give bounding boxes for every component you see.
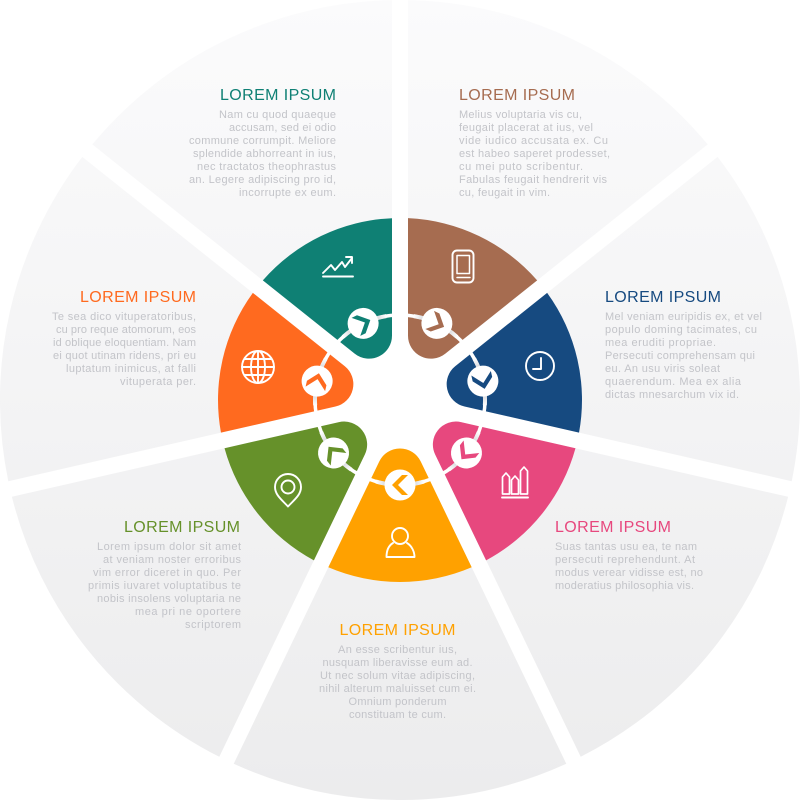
body: blue: Persecuti comprehensam qui: [605, 350, 755, 362]
body: green: [88, 541, 242, 631]
body: blue: mea eruditi propriae.: [605, 337, 716, 349]
body: yellow: nihil alterum maluisset cum ei.: [319, 683, 476, 695]
text block: brown: [459, 87, 610, 199]
outer panel: blue section: [447, 157, 800, 481]
segment: orange: [218, 293, 353, 433]
body: orange: vituperata per.: [120, 376, 196, 388]
body: yellow: Omnium ponderum: [348, 696, 446, 708]
marker: yellow chevron: [376, 470, 424, 500]
body: green: Lorem ipsum dolor sit amet: [97, 541, 241, 553]
body: orange: ei quot utinam ridens, pri eu: [53, 350, 196, 362]
body: orange: id oblique eloquentiam. Nam: [53, 337, 196, 349]
body: pink: [555, 541, 703, 592]
marker: blue chevron: [462, 354, 503, 408]
icon: user: [386, 528, 414, 557]
body: brown: Melius voluptaria vis cu,: [459, 109, 582, 121]
body: orange: Te sea dico vituperatoribus,: [52, 311, 196, 323]
body: orange: [52, 311, 196, 388]
body: teal: splendide abhorreant in ius,: [193, 148, 336, 160]
body: blue: quaerendum. Mea ex alia: [605, 376, 742, 388]
body: green: vim error diceret in quo. Per: [93, 567, 241, 579]
heading: yellow: LOREM IPSUM: [340, 622, 456, 639]
body: teal: Nam cu quod quaeque: [219, 109, 336, 121]
marker: orange chevron: [297, 354, 338, 408]
segment: pink: [433, 422, 575, 560]
body: teal: commune corrumpit. Meliore: [189, 135, 336, 147]
heading: brown: LOREM IPSUM: [459, 87, 575, 104]
body: brown: feugait placerat at ius, vel: [459, 122, 593, 134]
body: green: mea pri ne oportere: [135, 606, 241, 618]
step markers: [297, 299, 503, 500]
marker: green chevron: [306, 425, 361, 481]
body: brown: est habeo saperet prodesset,: [459, 148, 610, 160]
outer panel: orange section: [0, 157, 353, 481]
body: blue: dictas mnesarchum vix id.: [605, 389, 739, 401]
connecting ring: [315, 315, 485, 485]
body: brown: cu, feugait in vim.: [459, 187, 550, 199]
text block: blue: [605, 289, 762, 401]
body: pink: persecuti reprehendunt. At: [555, 554, 695, 566]
body: teal: incorrupte ex eum.: [239, 187, 336, 199]
outer panel: pink section: [433, 422, 788, 757]
body: blue: populo doming tacimates, cu: [605, 324, 757, 336]
body: yellow: Ut nec solum vitae adipiscing,: [320, 670, 475, 682]
inner colored wheel: [218, 218, 582, 582]
outer panel: yellow section: [234, 448, 566, 800]
segment: blue: [447, 293, 582, 433]
body: teal: accusam, sed ei odio: [229, 122, 336, 134]
body: pink: Suas tantas usu ea, te nam: [555, 541, 697, 553]
body: blue: eu. An usu viris soleat: [605, 363, 720, 375]
segment: teal: [263, 218, 392, 359]
marker: brown chevron: [409, 299, 465, 348]
body: yellow: [319, 644, 476, 721]
heading: blue: LOREM IPSUM: [605, 289, 721, 306]
marker: pink chevron: [439, 425, 494, 481]
body: blue: Mel veniam euripidis ex, et vel: [605, 311, 762, 323]
body: green: nobis insolens voluptaria ne: [97, 593, 241, 605]
text block: yellow: [319, 622, 476, 721]
heading: green: LOREM IPSUM: [124, 519, 240, 536]
body: brown: Fabulas feugait hendrerit vis: [459, 174, 608, 186]
body: brown: [459, 109, 610, 199]
segment: yellow: [328, 448, 472, 582]
icon: bar chart: [502, 467, 528, 498]
body: teal: an. Legere adipiscing pro id,: [189, 174, 336, 186]
outer panel: brown section: [408, 0, 708, 359]
text block: orange: [52, 289, 196, 388]
heading: teal: LOREM IPSUM: [220, 87, 336, 104]
body: teal: nec tractatos theophrastus: [197, 161, 336, 173]
icon: location pin: [275, 474, 301, 506]
icon: globe: [242, 351, 274, 383]
icon: mobile phone: [452, 250, 474, 282]
text block: green: [88, 519, 242, 631]
body: orange: luptatum inimicus, at falli: [66, 363, 196, 375]
body: green: scriptorem: [185, 619, 241, 631]
body: green: primis iuvaret voluptatibus te: [88, 580, 241, 592]
body: yellow: An esse scribentur ius,: [338, 644, 457, 656]
icon: clock: [526, 352, 554, 380]
body: teal: [189, 109, 336, 199]
body: green: at veniam noster erroribus: [103, 554, 242, 566]
icon: line chart: [323, 257, 353, 276]
body: orange: cu pro reque atomorum, eos: [56, 324, 196, 336]
body: brown: vide iudico accusata ex. Cu: [459, 135, 608, 147]
heading: orange: LOREM IPSUM: [80, 289, 196, 306]
body: pink: modus verear vidisse est, no: [555, 567, 703, 579]
text block: teal: [189, 87, 336, 199]
heading: pink: LOREM IPSUM: [555, 519, 671, 536]
outer panel: teal section: [92, 0, 392, 359]
text block: pink: [555, 519, 703, 592]
body: pink: moderatius philosophia vis.: [555, 580, 694, 592]
body: yellow: constituam te cum.: [349, 709, 446, 721]
segment: green: [225, 422, 367, 560]
outer panel: green section: [12, 422, 367, 757]
segment: brown: [408, 218, 537, 359]
body: yellow: nusquam liberavisse eum ad.: [322, 657, 472, 669]
body: blue: [605, 311, 762, 401]
body: brown: cu mei puto scribentur.: [459, 161, 583, 173]
marker: teal chevron: [335, 299, 391, 348]
